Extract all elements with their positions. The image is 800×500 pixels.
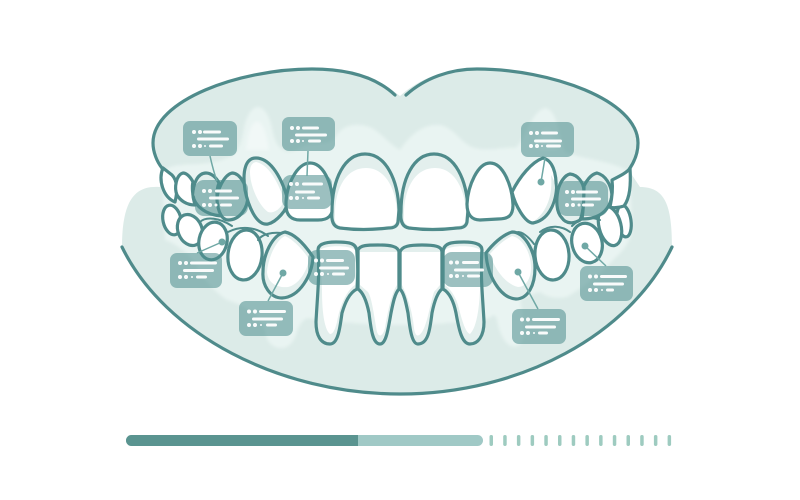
upper teeth <box>161 154 630 230</box>
lower back tooth left 1 <box>160 203 184 237</box>
lower teeth <box>160 203 633 344</box>
upper premolar left 1 <box>193 173 222 216</box>
callout: on lower left incisor <box>308 250 355 285</box>
lower back tooth left 3 <box>195 220 231 262</box>
upper canine right <box>512 158 556 223</box>
callout: upper left far <box>183 121 237 156</box>
callout: lower left near <box>239 301 293 336</box>
lower back tooth right 2 <box>594 204 626 248</box>
callout: upper right <box>521 122 574 157</box>
lower back tooth left 4 <box>225 228 265 282</box>
callout: on right premolars <box>558 181 608 216</box>
upper lateral left <box>286 163 333 220</box>
upper molar left back <box>161 168 177 202</box>
lower incisor A <box>316 242 358 344</box>
gum outlines <box>122 69 672 394</box>
callout: lower left far <box>170 253 222 288</box>
callout: lower right near <box>512 309 566 344</box>
lower incisor B <box>358 245 399 344</box>
upper canine left <box>244 158 288 224</box>
gum background <box>122 69 672 394</box>
upper premolar right 1 <box>557 174 584 223</box>
upper premolar right 2 <box>582 173 612 219</box>
upper lateral right <box>467 163 513 220</box>
callout: lower right far <box>580 266 633 301</box>
connecting arcs between back teeth <box>200 218 600 244</box>
lower incisor D <box>443 242 484 344</box>
upper left lobe outline <box>153 69 395 168</box>
lower jaw outline <box>122 247 672 394</box>
upper molar left <box>176 173 195 205</box>
upper right lobe outline <box>406 69 638 168</box>
leader lines and anchor dots <box>197 151 606 309</box>
upper central left <box>332 154 399 230</box>
upper premolar left 2 <box>217 173 248 220</box>
lower premolar right <box>486 232 535 299</box>
lower premolar left <box>263 232 313 298</box>
upper molar right <box>610 168 630 208</box>
tick marks <box>490 435 671 446</box>
upper central right <box>401 154 468 230</box>
lower back tooth right 4 <box>533 229 571 281</box>
lower back tooth right 3 <box>568 220 606 266</box>
progress bar <box>126 435 671 446</box>
callout: upper left near <box>282 117 335 151</box>
lower back tooth left 2 <box>173 211 207 249</box>
callout: on left premolars <box>195 180 248 216</box>
callout: on lower right incisor <box>443 252 493 287</box>
callout: on upper left lateral <box>282 175 332 209</box>
lower back tooth right 1 <box>615 204 633 238</box>
lower incisor C <box>400 245 442 344</box>
